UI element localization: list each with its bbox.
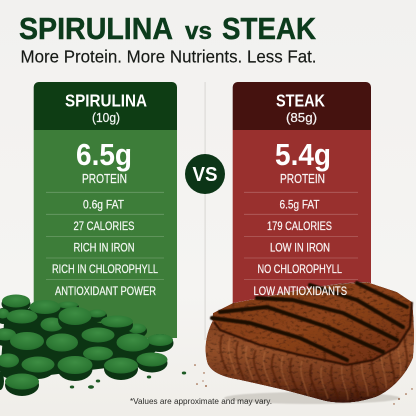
steak grill marks	[212, 283, 407, 360]
image: grilled steak	[205, 282, 414, 404]
spirulina protein label: PROTEIN	[82, 172, 127, 186]
steak heading: STEAK	[276, 90, 325, 110]
spirulina iron: RICH IN IRON	[74, 240, 134, 254]
spirulina calories: 27 CALORIES	[74, 219, 134, 233]
steak protein value: 5.4g	[275, 137, 331, 172]
steak serving: (85g)	[286, 111, 317, 125]
steak top edge char	[214, 302, 412, 365]
spirulina fat: 0.6g FAT	[83, 198, 125, 212]
subtitle: More Protein. More Nutrients. Less Fat.	[20, 46, 316, 66]
steak chlorophyll: NO CHLOROPHYLL	[258, 262, 342, 276]
panel: steak	[233, 82, 371, 320]
title: SPIRULINA	[19, 12, 173, 46]
vs badge	[185, 154, 225, 194]
spirulina heading: SPIRULINA	[65, 90, 147, 110]
center divider	[204, 82, 206, 340]
low antioxidants row: LOW ANTIOXIDANTS	[254, 284, 347, 298]
spirulina protein value: 6.5g	[76, 137, 132, 172]
spirulina chlorophyll: RICH IN CHLOROPHYLL	[52, 262, 158, 276]
spirulina antioxidants: ANTIOXIDANT POWER	[55, 284, 156, 298]
spirulina serving: (10g)	[92, 111, 120, 125]
steak iron: LOW IN IRON	[270, 240, 330, 254]
title: vs	[185, 18, 212, 45]
crumbs	[194, 364, 413, 405]
panel: spirulina	[34, 82, 177, 338]
title: STEAK	[222, 12, 316, 46]
steak calories: 179 CALORIES	[267, 219, 332, 233]
vs badge: VS	[192, 164, 218, 186]
title	[19, 12, 316, 46]
steak side fibres	[220, 330, 407, 400]
footnote: *Values are approximate and may vary.	[130, 396, 272, 406]
steak fat: 6.5g FAT	[280, 198, 320, 212]
image: spirulina tablets	[0, 294, 186, 396]
steak protein label: PROTEIN	[280, 172, 325, 186]
